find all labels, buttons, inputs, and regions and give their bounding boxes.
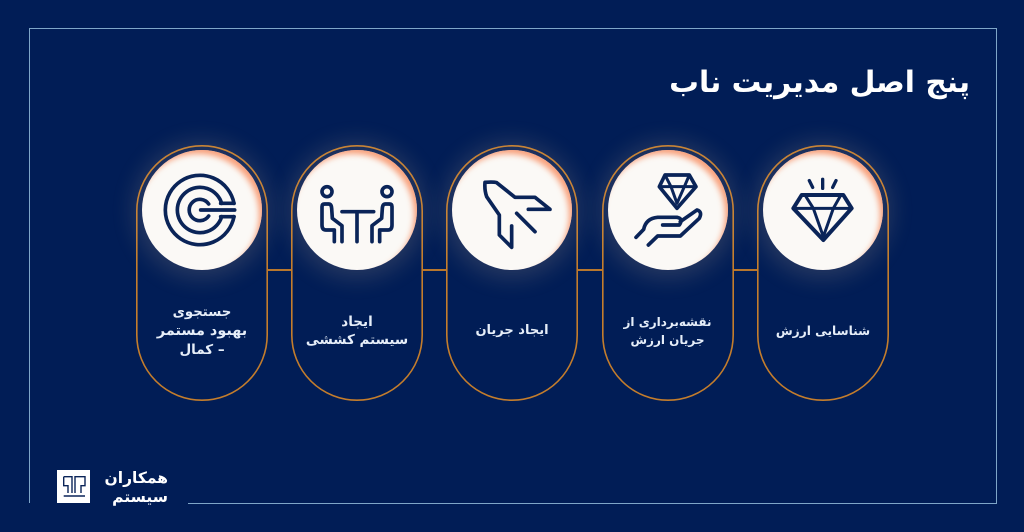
label: continuous improvement [156,305,247,358]
connector 1 [267,269,291,271]
logo mark [57,470,90,502]
connector 3 [577,269,602,271]
label: pull system: ایجاد [341,314,373,330]
panel: flow [436,134,588,401]
label: continuous improvement: جستجوی [173,305,231,320]
panel: value stream mapping [592,134,744,401]
connector 4 [733,269,757,271]
label: pull system: سیستم کششی [306,332,408,348]
label: continuous improvement: – کمال [179,342,225,358]
panel: continuous improvement [126,134,278,401]
title: پنج اصل مدیریت ناب [669,65,970,100]
logo text: سیستم [112,488,168,506]
label: pull system [306,314,408,348]
label: flow: ایجاد جریان [475,323,549,338]
icon: people at table [297,150,417,270]
panel: pull system [282,134,432,401]
logo text [105,468,168,506]
label: identify value: شناسایی ارزش [776,324,870,338]
icon: target [142,150,262,270]
label: value stream mapping: جریان ارزش [630,333,705,347]
label: value stream mapping [623,314,712,347]
panel: identify value [748,134,898,401]
icon: hand with diamond [608,150,728,270]
icon: shining diamond [763,150,883,270]
label: continuous improvement: بهبود مستمر [157,323,247,339]
label: value stream mapping: نقشه‌برداری از [624,314,712,328]
connector 2 [422,269,446,271]
logo text: همکاران [105,468,168,486]
icon: plane [452,150,572,270]
